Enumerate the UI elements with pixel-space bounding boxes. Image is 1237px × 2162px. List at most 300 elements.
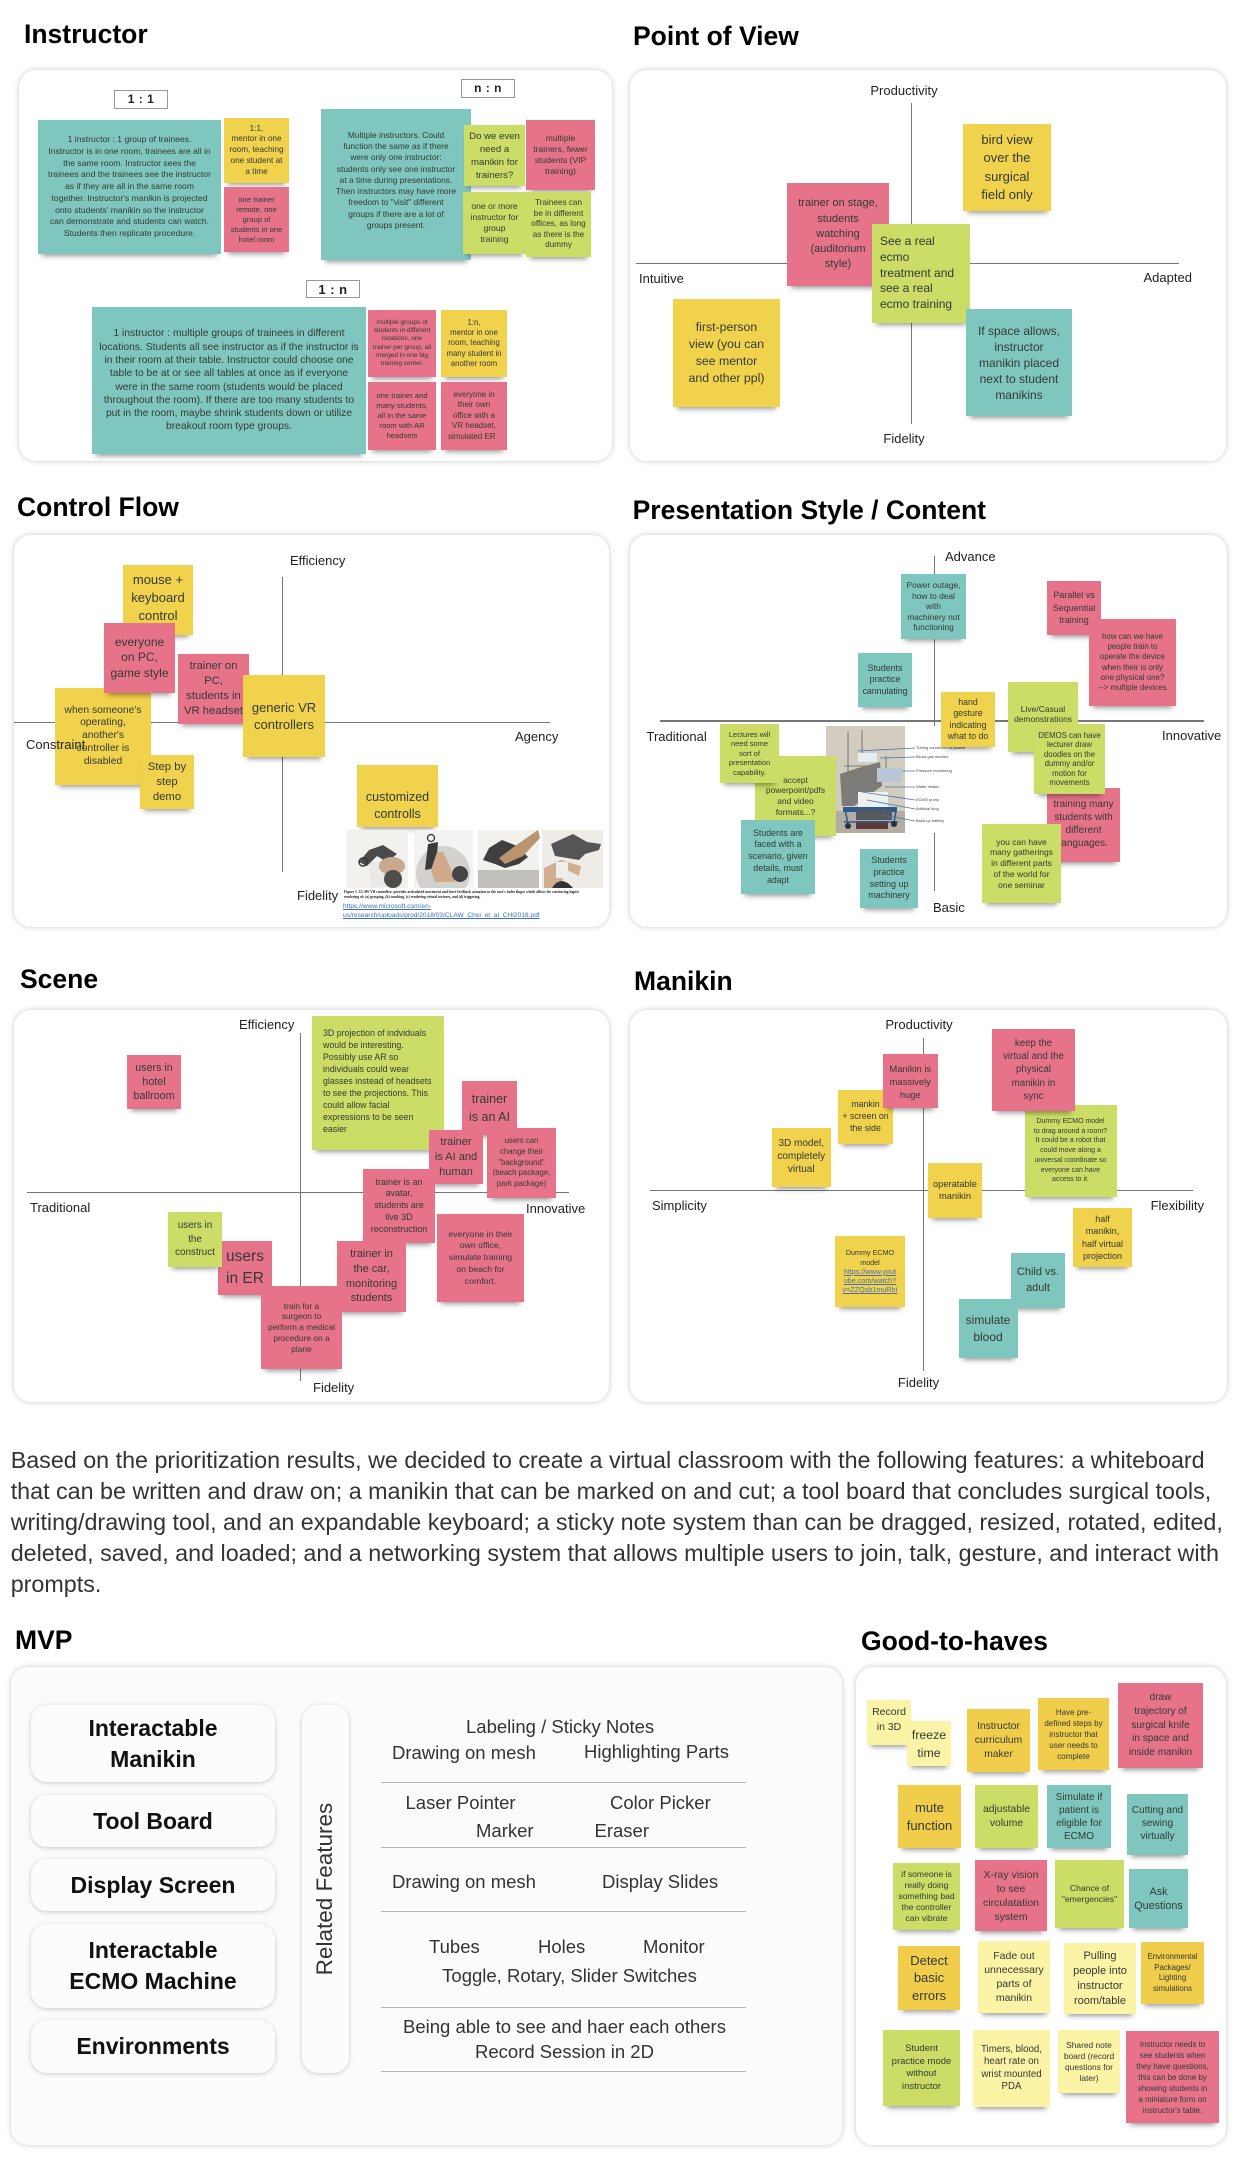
axis label: Constraint: Constraint [26, 737, 85, 752]
feature: Eraser: Eraser [594, 1820, 649, 1841]
note: chance of emergencies: "emergencies" [1062, 1894, 1117, 1904]
note: 1:1 description: Students then replicate procedure. [64, 228, 195, 238]
note: instructor manikin placed: manikin placed [979, 356, 1059, 370]
note: users in the construct [168, 1212, 222, 1267]
note: hand gesture: what to do [948, 731, 988, 741]
note: trainer on stage: watching [816, 228, 860, 240]
note: different languages [1047, 788, 1120, 862]
note: controller vibrate: can vibrate [905, 1913, 948, 1923]
note: different languages: different [1066, 825, 1101, 836]
note: instructor manikin placed: If space allows, [978, 324, 1060, 338]
note: timers PDA: Timers, blood, [981, 2044, 1042, 2054]
note: customized controls: customized [366, 790, 429, 804]
paragraph: summary: that can be written and draw on; a manikin that can be marked on and cut; a tool board that concludes surgical tools, [11, 1478, 1211, 1504]
note: manikin for trainers: need a [480, 144, 509, 154]
axis label: Efficiency: Efficiency [290, 553, 345, 568]
note: hotel ballroom: ballroom [134, 1090, 174, 1102]
paragraph: summary: Based on the prioritization results, we decided to create a virtual classroom with the following features: a whiteboard [11, 1446, 1205, 1472]
note: environmental packages: Lighting [1159, 1973, 1186, 1982]
caption: CLAW figure [344, 890, 579, 899]
note: hotel ballroom: users in [135, 1062, 173, 1074]
note: half manikin [1073, 1208, 1132, 1267]
note: instructor for group training: group [484, 223, 505, 233]
note: curriculum maker [967, 1709, 1030, 1772]
note: trainer in the car: monitoring [346, 1278, 397, 1290]
note: 1:n description: table to be at or see all tables at once as if everyone [110, 368, 348, 379]
note: first-person view: see mentor [696, 354, 757, 368]
note: users in the construct: the [188, 1234, 202, 1245]
label: 1:1: 1 : 1 [128, 92, 154, 106]
axis label: Fidelity: Fidelity [297, 888, 338, 903]
panel: Instructor [18, 70, 612, 461]
note: detect basic errors: errors [912, 1988, 946, 2003]
axis label: Innovative: Innovative [526, 1201, 585, 1216]
note: multiple groups merged: merged in one big [376, 352, 428, 359]
note: trainees in offices: be in different [534, 209, 583, 218]
panel: MVP [11, 1667, 842, 2145]
note: bird view: over the [984, 150, 1030, 165]
heading: MVP: MVP [15, 1625, 72, 1655]
note: 3D projection: to see the projections. This [323, 1088, 428, 1098]
note: mentor one student: one student at [231, 156, 282, 165]
photo: labelled ECMO machine: Back-up battery [916, 818, 944, 823]
note: demos with doodles [1034, 724, 1105, 794]
note: controller vibrate: if someone is [901, 1869, 952, 1879]
note: trainer in the car [337, 1241, 406, 1312]
note: fade out parts: Fade out [993, 1950, 1035, 1962]
note: live demonstrations: demonstrations [1014, 714, 1072, 724]
axis label: Flexibility: Flexibility [1151, 1198, 1204, 1213]
note: generic VR controllers [243, 675, 325, 757]
axis label: Traditional: Traditional [30, 1200, 90, 1215]
note: simulate eligibility: Simulate if [1056, 1792, 1102, 1802]
note: 1:1 description [38, 120, 221, 254]
label: 1:1 [114, 90, 168, 109]
note: change background [487, 1128, 556, 1198]
note: trainer is an AI: is an AI [469, 1110, 510, 1124]
note: when someone's operating: another's [82, 730, 124, 741]
axis label: Fidelity: Fidelity [883, 431, 925, 446]
note: 1:n mentor [441, 310, 507, 377]
note: x-ray vision: to see [997, 1882, 1025, 1894]
note: trainer on PC [178, 654, 249, 724]
note: medical procedure on plane [261, 1286, 342, 1369]
note: timers PDA: heart rate on [984, 2056, 1039, 2067]
note: keep virtual and physical in sync: virtual and the [1003, 1051, 1064, 1062]
note: AI and human: trainer [440, 1136, 472, 1148]
note: multiple groups merged: training center. [381, 360, 423, 367]
note: one trainer remote: students in one [231, 224, 282, 234]
note: 3D projection [312, 1016, 444, 1150]
heading: Manikin: Manikin [634, 966, 733, 996]
note: surgical knife trajectory [1118, 1683, 1203, 1768]
pill: Display Screen: Display Screen [71, 1872, 235, 1898]
note: instructor manikin placed [966, 309, 1072, 416]
note: trainer on stage: students [817, 213, 859, 225]
note: keep virtual and physical in sync: sync [1024, 1091, 1043, 1102]
pill: Interactable Manikin: Manikin [110, 1746, 196, 1772]
note: everyone on PC [104, 623, 175, 693]
note: change background: "background" [498, 1158, 545, 1167]
note: manikin massively huge: massively [890, 1076, 931, 1086]
note: child vs adult: adult [1026, 1282, 1050, 1294]
axis label: Agency: Agency [515, 729, 558, 744]
note: first-person view: and other ppl) [689, 371, 764, 385]
note: half manikin: manikin, [1086, 1226, 1119, 1236]
note: instructor for group training [463, 192, 526, 254]
feature: Toggle, Rotary, Slider Switches: Toggle, Rotary, Slider Switches [442, 1965, 697, 1986]
note: 3D projection: individuals could wear [323, 1064, 409, 1074]
note: simulate blood: simulate [966, 1313, 1010, 1327]
note: beach comfort: on beach for [456, 1264, 505, 1274]
note: mankin screen on the side: mankin [851, 1099, 880, 1109]
note: scenario details: adapt [767, 875, 789, 885]
label: 1:n: 1 : n [318, 282, 348, 297]
note: 1:1 description: Instructor is in one room, trainees are all in [48, 146, 211, 156]
note: simulate blood: blood [973, 1330, 1003, 1344]
feature: Display Slides: Display Slides [602, 1871, 718, 1892]
feature: see and hear each other: Being able to see and haer each others [403, 2016, 726, 2037]
note: mankin screen on the side: the side [850, 1123, 881, 1133]
note: demos with doodles: DEMOS can have [1038, 730, 1101, 740]
note: real ecmo: ecmo [880, 250, 909, 264]
note: customized controls: controlls [374, 806, 421, 820]
note: ask questions [1129, 1869, 1188, 1928]
note: first-person view [673, 299, 780, 407]
note: scenario details: details, must [753, 863, 803, 873]
note: instructor sees students: a miniature form on [1138, 2094, 1206, 2104]
note: step by step demo: demo [153, 790, 181, 802]
note: medical procedure on plane: surgeon to [282, 1311, 321, 1321]
note: cutting and sewing [1127, 1794, 1188, 1855]
note: many gatherings: in different parts [991, 858, 1052, 868]
note: trainer is an AI [462, 1081, 517, 1135]
note: multiple groups merged: multiple groups of [376, 319, 428, 326]
note: when someone's operating: when someone's [65, 705, 141, 716]
note: shared note board: questions for [1065, 2062, 1113, 2072]
heading: Control Flow: Control Flow [17, 492, 179, 522]
note: detect basic errors: basic [914, 1970, 944, 1985]
note: student practice mode: without [906, 2068, 937, 2079]
note: adjustable volume: volume [990, 1818, 1023, 1828]
note: trainees in offices: as there is the [533, 230, 584, 239]
note: hotel ballroom: hotel [142, 1076, 166, 1088]
note: dummy ECMO robot: everyone can have [1041, 1167, 1100, 1174]
note: n:n description: at a time during presentations. [340, 175, 452, 185]
note: 3D projection: easier [323, 1124, 347, 1134]
note: VR headset office [441, 382, 507, 450]
note: when someone's operating [55, 688, 151, 785]
note: manikin for trainers: trainers? [476, 170, 513, 180]
note: trainer on PC: VR headset [184, 705, 243, 717]
note: adjustable volume: adjustable [983, 1804, 1030, 1814]
note: one trainer remote: one trainer [238, 194, 275, 204]
note: mankin screen on the side [838, 1090, 893, 1144]
note: trainer on stage: trainer on stage, [798, 197, 878, 209]
note: chance of emergencies [1055, 1860, 1124, 1928]
note: 1:n description: were in the same room (students would be placed [115, 382, 343, 392]
note: timers PDA: PDA [1002, 2081, 1021, 2092]
photo strip: CLAW controller [347, 830, 603, 888]
feature: Drawing on mesh: Drawing on mesh [392, 1871, 536, 1892]
note: presentation capability: capability. [733, 768, 766, 777]
note: dummy ECMO robot [1024, 1105, 1116, 1197]
note: mankin screen on the side: + screen on [842, 1111, 889, 1121]
axis label: Efficiency: Efficiency [239, 1017, 294, 1032]
note: trainer in the car: students [351, 1292, 392, 1304]
note: 3D model virtual [772, 1128, 830, 1187]
note: 3D projection: would be interesting. [323, 1040, 404, 1050]
heading: Point of View: Point of View [633, 20, 799, 50]
note: curriculum maker: maker [984, 1748, 1013, 1760]
note: pre-defined steps: Have pre- [1056, 1708, 1091, 1716]
axis label: Productivity: Productivity [885, 1017, 953, 1032]
note: practice cannulating: cannulating [862, 686, 908, 696]
note: pulling people: instructor [1077, 1980, 1123, 1992]
note: AR headsets: room with AR [379, 421, 425, 430]
note: 1:n description: put in the room, maybe shrink students down or utilize [106, 408, 352, 419]
note: detect basic errors: Detect [910, 1953, 948, 1968]
note: timers PDA: wrist mounted [981, 2068, 1042, 2080]
note: cutting and sewing: Cutting and [1132, 1805, 1183, 1816]
note: trainees in offices: dummy [545, 240, 572, 249]
note: beach comfort: comfort. [465, 1276, 496, 1286]
axis label: Fidelity: Fidelity [313, 1380, 354, 1395]
caption: CLAW figure: rendering of: (a) grasping, (b) touching, (c) rendering virtual textures, and (d) triggering. [344, 895, 480, 899]
heading: Scene: Scene [20, 964, 98, 994]
note: detect basic errors [898, 1946, 960, 2010]
note: avatar reconstruction: avatar, [385, 1188, 413, 1198]
note: mouse and keyboard [123, 565, 193, 635]
note: generic VR controllers: generic VR [252, 700, 316, 714]
note: controller vibrate: something bad [898, 1891, 955, 1901]
note: 1:1 description: together. Instructor's manikin is projected [52, 193, 207, 203]
note: 1:1 description: as if they are all in the same room [65, 181, 194, 191]
note: different languages: languages. [1059, 838, 1108, 849]
note: surgical knife trajectory: surgical knife [1131, 1720, 1190, 1731]
note: x-ray vision: X-ray vision [984, 1868, 1038, 1880]
pill: Related Features [302, 1705, 349, 2073]
label: n:n [461, 79, 515, 98]
note: AR headsets: headsets [387, 431, 417, 440]
note: keep virtual and physical in sync [992, 1029, 1075, 1111]
note: AI and human: is AI and [435, 1150, 477, 1162]
note: beach comfort: own office, [460, 1240, 501, 1250]
feature: Record Session in 2D: Record Session in 2D [475, 2041, 654, 2062]
note: first-person view: first-person [696, 320, 757, 334]
note: parallel vs sequential: Sequential [1053, 603, 1095, 613]
note: power outage: machinery not [907, 612, 960, 622]
note: AR headsets: many students, [376, 401, 428, 410]
note: multiple trainers: multiple [546, 133, 575, 143]
note: instructor sees students: showing students in [1138, 2084, 1207, 2092]
note: manikin massively huge: Manikin is [889, 1062, 931, 1074]
note: mouse and keyboard: mouse + [133, 572, 183, 587]
note: avatar reconstruction: live 3D [385, 1212, 413, 1222]
note: trainer is an AI: trainer [472, 1092, 507, 1106]
note: freeze time: time [917, 1746, 941, 1760]
note: shared note board [1058, 2030, 1120, 2093]
note: multiple groups merged: trainer per group, all [373, 344, 431, 350]
pill: Environments: Environments [76, 2033, 230, 2059]
note: instructor for group training: one or more [471, 201, 518, 211]
note: 1:n description: breakout room type groups. [166, 421, 292, 432]
note: avatar reconstruction: reconstruction [371, 1224, 427, 1234]
note: AI and human [429, 1130, 483, 1184]
note: beach comfort [437, 1214, 524, 1302]
note: beach comfort: simulate training [449, 1252, 512, 1262]
note: hand gesture [941, 692, 995, 747]
note: trainer on stage [787, 183, 889, 286]
note: 1:n mentor: 1:n, [467, 318, 480, 327]
note: dummy ECMO link: https://www.yout [844, 1267, 896, 1276]
photo: labelled ECMO machine: Tubing connected to patient [916, 745, 965, 750]
note: mute function [898, 1785, 961, 1848]
note: surgical knife trajectory: inside manikin [1129, 1747, 1192, 1758]
note: multiple groups merged [368, 310, 436, 377]
note: student practice mode [883, 2030, 960, 2106]
note: surgical knife trajectory: draw [1150, 1692, 1171, 1703]
note: parallel vs sequential [1047, 581, 1101, 635]
note: accept powerpoint: accept [783, 775, 808, 785]
note: n:n description: function the same as if there [343, 141, 449, 151]
note: instructor sees students: they have questions, [1136, 2062, 1209, 2070]
note: many gatherings: one seminar [998, 880, 1045, 890]
note: multiple groups merged: locations, one [382, 335, 422, 342]
note: AR headsets: all in the same [378, 411, 426, 420]
note: real ecmo: ecmo training [880, 297, 952, 311]
note: users in the construct: construct [175, 1247, 215, 1258]
note: environmental packages: simulations [1153, 1984, 1192, 1992]
pill: Interactable ECMO Machine: Interactable [88, 1937, 218, 1963]
axis label: Advance: Advance [945, 549, 996, 564]
note: pre-defined steps: user needs to [1049, 1740, 1098, 1750]
note: instructor sees students [1126, 2031, 1219, 2123]
note: multiple trainers: training) [545, 166, 576, 176]
note: many gatherings [982, 824, 1061, 903]
feature: Monitor: Monitor [643, 1936, 705, 1957]
note: multiple devices: one physical one? [1101, 673, 1164, 682]
note: trainees in offices: Trainees can [535, 198, 582, 207]
note: student practice mode: instructor [902, 2080, 941, 2092]
note: ask questions: Questions [1134, 1900, 1183, 1912]
note: keep virtual and physical in sync: physical [1016, 1064, 1051, 1075]
note: 3D projection: could allow facial [323, 1100, 390, 1110]
note: manikin massively huge [883, 1054, 938, 1108]
note: controller vibrate: the controller [902, 1902, 951, 1912]
note: instructor manikin placed: next to student [980, 372, 1058, 386]
label: 1:n [306, 280, 360, 298]
note: users in ER: in ER [226, 1270, 264, 1287]
note: cutting and sewing: sewing [1142, 1818, 1173, 1829]
note: practice cannulating: practice [870, 674, 900, 684]
note: mentor one student: mentor in one [231, 134, 282, 143]
note: mouse and keyboard: control [138, 608, 178, 623]
note: demos with doodles: movements [1049, 778, 1090, 787]
note: manikin for trainers [464, 125, 525, 186]
note: shared note board: later) [1079, 2072, 1099, 2082]
note: dummy ECMO link: model [860, 1258, 880, 1267]
pill: Tool Board: Tool Board [93, 1808, 213, 1834]
note: when someone's operating: controller is [77, 743, 129, 754]
note: dummy ECMO link [835, 1236, 905, 1307]
note: 3D model virtual: virtual [788, 1164, 815, 1175]
note: multiple devices: --> multiple devices [1098, 683, 1167, 692]
pill: Interactable ECMO Machine: ECMO Machine [69, 1968, 237, 1994]
note: n:n description: were only one instructor: [350, 152, 442, 162]
note: VR headset office: simulated ER . [448, 432, 500, 441]
panel: Presentation Style / Content [630, 535, 1226, 927]
note: n:n description: Then instructors may have more [336, 186, 456, 196]
note: hand gesture: hand [958, 696, 978, 706]
note: trainees in offices [526, 192, 591, 257]
photo: labelled ECMO machine: Blood gas monitor [916, 754, 948, 759]
note: freeze time: freeze [912, 1728, 946, 1742]
note: trainer in the car: trainer in [350, 1248, 393, 1260]
note: users in ER [218, 1241, 272, 1295]
feature: Tubes: Tubes [429, 1936, 480, 1957]
note: VR headset office: office with a [453, 411, 495, 420]
note: avatar reconstruction [363, 1169, 435, 1243]
note: 1:n description [92, 307, 366, 454]
feature: Drawing on mesh: Drawing on mesh [392, 1742, 536, 1763]
note: manikin for trainers: Do we even [469, 130, 520, 142]
note: mentor one student: room, teaching [229, 145, 284, 154]
note: half manikin: projection [1083, 1251, 1122, 1261]
note: student practice mode: practice mode [892, 2056, 951, 2066]
note: power outage [901, 574, 966, 639]
note: real ecmo: see a real [880, 281, 933, 295]
note: multiple trainers [526, 120, 595, 190]
note: n:n description: groups if there are a lot of [348, 209, 444, 219]
note: demos with doodles: doodles on the [1044, 750, 1095, 758]
note: 3D projection: expressions to be seen [323, 1112, 413, 1122]
note: n:n description: freedom to "visit" different [348, 197, 444, 207]
note: instructor manikin placed: instructor [994, 340, 1044, 354]
note: n:n description: groups present. [367, 220, 425, 230]
paragraph: summary [10, 1446, 1223, 1597]
note: 1:n mentor: room, teaching [448, 338, 500, 347]
note: one trainer remote [224, 187, 289, 252]
note: step by step demo: step [156, 776, 178, 788]
note: n:n description: Multiple instructors. Could [348, 130, 444, 140]
note: 1:n mentor: mentor in one [450, 328, 498, 337]
note: customized controls [357, 765, 438, 827]
note: mentor one student: 1:1, [250, 124, 263, 132]
pill: Interactable ECMO Machine [31, 1924, 275, 2008]
note: dummy ECMO link: ube.com/watch? [844, 1276, 896, 1285]
note: instructor sees students: Instructor needs to [1140, 2040, 1205, 2048]
note: pre-defined steps: complete [1057, 1752, 1090, 1760]
link: CLAW paper [343, 903, 540, 919]
note: accept powerpoint [755, 756, 836, 836]
note: demos with doodles: motion for [1052, 768, 1087, 778]
note: mentor one student: a time [245, 167, 268, 176]
note: trainer on PC: trainer on [190, 660, 237, 672]
pill: Interactable Manikin [31, 1705, 275, 1782]
note: pulling people: people into [1073, 1964, 1127, 1976]
paragraph: summary: writing/drawing tool, and an expandable keyboard; a sticky note system than can be dragged, resized, rotated, edited, [11, 1508, 1223, 1534]
panel: Scene [14, 1010, 608, 1402]
note: accept powerpoint: powerpoint/pdfs [766, 785, 825, 795]
note: practice cannulating: Students [868, 663, 902, 673]
note: real ecmo: See a real [880, 234, 935, 248]
note: power outage: how to deal [912, 591, 955, 601]
note: users in ER: users [226, 1248, 264, 1265]
note: multiple devices: when their is only [1102, 662, 1163, 672]
note: 1:n mentor: another room [451, 359, 497, 368]
pill: Display Screen [31, 1859, 275, 1911]
